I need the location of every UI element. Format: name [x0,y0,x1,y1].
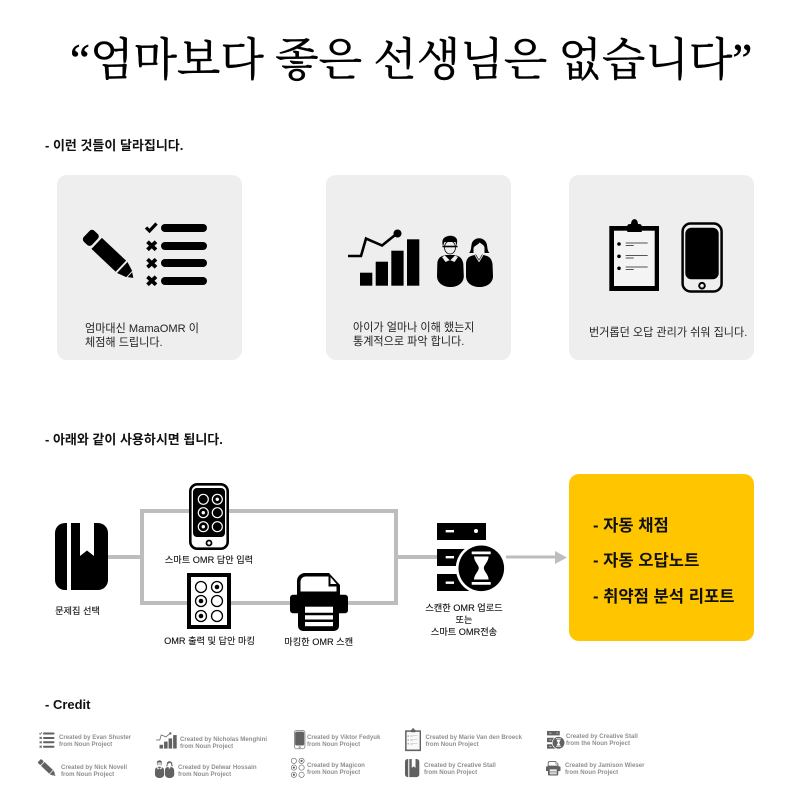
heading: credit: - Credit [45,697,91,712]
credit: Delwar Hossain: Created by Delwar Hossain [178,764,257,771]
icon: server with hourglass [437,523,507,594]
credit: Viktor Fedyuk [294,730,381,749]
icon: answer checklist [146,224,207,285]
credit: Marie Van den Broeck: Created by Marie Van den Broeck [426,734,523,741]
panel: automatic grading: 체점해 드립니다. [85,336,163,349]
label: OMR 출력 및 답안 마킹 [164,635,255,646]
flow connector lines [108,511,437,603]
panel: results [569,474,754,641]
text: statistics: 아이가 얼마나 이해 했는지 [353,320,475,334]
panel: results: - 자동 오답노트 [593,551,699,570]
credit: Magicon: Created by Magicon [307,762,365,769]
credit: Marie Van den Broeck [405,728,523,751]
panel: automatic grading [57,175,242,360]
title: “엄마보다 좋은 선생님은 없습니다” [70,35,752,85]
credit: Nick Novell: from Noun Project [61,771,114,778]
credit: Jamison Wieser: Created by Jamison Wieser [565,762,645,769]
text: wrong answer management: 번거롭던 오답 관리가 쉬워 집니다. [589,326,747,339]
credit: Evan Shuster: from Noun Project [59,741,112,748]
credit: Creative Stall server: from the Noun Project [566,740,630,747]
step: upload [425,523,507,637]
credit: Evan Shuster [39,732,132,748]
icon: OMR sheet [187,573,231,629]
label: 스캔한 OMR 업로드 [425,602,503,613]
panel: statistics: 통계적으로 파악 합니다. [353,335,464,348]
credit: Creative Stall book: from Noun Project [424,769,477,776]
credit: Nick Novell: Created by Nick Novell [61,764,127,771]
credit: Nick Novell [37,759,127,778]
icon: printer [290,573,348,631]
icon: clipboard [609,219,659,291]
credit: Nicholas Menghini: Created by Nicholas Menghini [180,736,267,743]
credit: Magicon [291,758,365,777]
heading: what changes: - 이런 것들이 달라집니다. [45,138,183,153]
panel: results: - 취약점 분석 리포트 [593,587,734,606]
step: upload: 또는 [456,615,472,625]
icon: book [55,523,108,590]
label: 문제집 선택 [55,605,100,616]
credit: Creative Stall server [547,731,638,749]
panel: wrong answer management [569,175,754,360]
step: print and mark OMR [164,573,255,646]
credit: Nicholas Menghini [156,732,267,750]
step: upload: 스마트 OMR전송 [431,627,497,637]
icon: two people [437,236,493,287]
text: automatic grading: 엄마대신 MamaOMR 이 [85,322,199,335]
credit: Evan Shuster: Created by Evan Shuster [59,734,132,741]
icon: smartphone [683,224,722,292]
arrow to results [506,551,567,564]
credit: Delwar Hossain: from Noun Project [178,771,231,778]
credit: Marie Van den Broeck: from Noun Project [426,741,479,748]
credit: Jamison Wieser [546,761,645,776]
credit: Creative Stall server: Created by Creative Stall [566,733,638,740]
label: 마킹한 OMR 스캔 [284,636,353,647]
label: 스마트 OMR 답안 입력 [165,554,253,565]
step: scan marked OMR [284,573,353,647]
icon: rising bar chart [348,230,419,286]
step: choose workbook [55,523,108,616]
panel: statistics [326,175,511,360]
credit: Jamison Wieser: from Noun Project [565,769,618,776]
credit: Creative Stall book: Created by Creative Stall [424,762,496,769]
step: smart OMR input [165,484,253,565]
credit: Delwar Hossain [155,760,257,778]
panel: results: - 자동 채점 [593,516,669,535]
credit: Nicholas Menghini: from Noun Project [180,743,233,750]
credit: Viktor Fedyuk: Created by Viktor Fedyuk [307,734,381,741]
credit: Creative Stall book [405,759,496,777]
icon: phone with answer bubbles [190,484,228,549]
heading: how to use: - 아래와 같이 사용하시면 됩니다. [45,432,223,447]
credit: Magicon: from Noun Project [307,769,360,776]
credit: Viktor Fedyuk: from Noun Project [307,741,360,748]
credits [37,728,645,778]
icon: pencil [81,228,139,283]
